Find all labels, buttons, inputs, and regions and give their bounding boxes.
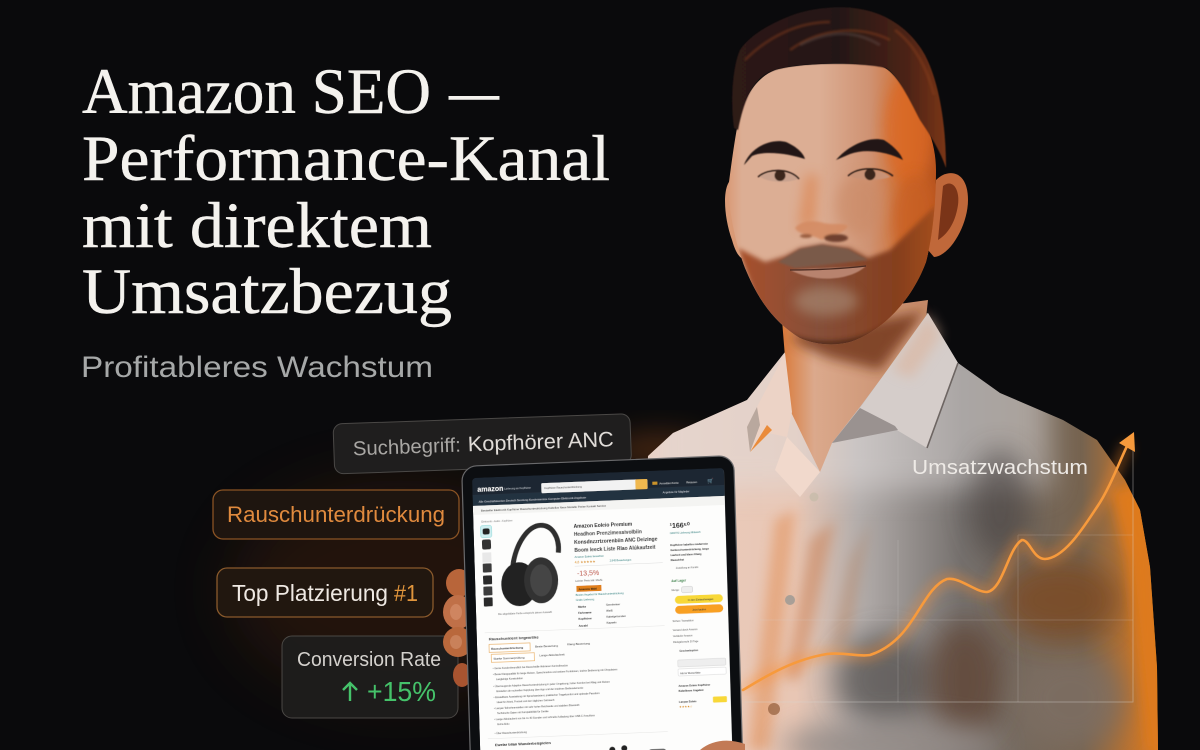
card: search term: Kopfhörer ANC [467,428,614,456]
card: Rauschunterdrückung [213,490,459,539]
tablet screen: 4,6 ★★★★★ [575,560,596,564]
tablet screen: Kapseln [606,620,617,625]
tablet screen: Letzter Preis inkl. MwSt. [575,578,603,583]
buy box: In den Einkaufswagen [688,597,714,602]
buy box: Amazon Eoleio Kopfhörer [678,683,710,688]
product title: Amazon Eoleio Premium [574,522,633,530]
growth line glow [743,444,1128,690]
tablet screen: Marke [578,605,587,609]
lower section: • Gerne Kundenfreundlich bei Rauschstille Aktivieren Kontrollmodus [493,664,569,670]
neck [782,300,928,472]
lower section: Langlebige Konstruktion [496,677,524,681]
tablet screen: Farbname [578,610,592,615]
card: Top Platzierung [217,568,433,617]
tablet frame [462,456,743,750]
card: Conversion Rate [282,636,458,718]
amazon header [472,468,725,515]
lower section: • Lange Akkulaufzeit von bis zu 40 Stunden und schnelle Aufladung über USB-C Anschluss [494,714,596,721]
chart label: Umsatzwachstum [912,457,1088,479]
amazon header: Retouren [686,480,698,484]
buy box: Rauschfrei [671,558,684,562]
lower section: Ewelar bilan Wunderbeispielen [495,741,552,747]
buy box: Sichere Transaktion [673,619,694,623]
product title: Konsdnzzrtzorenbiin ANC Deizinge [574,537,658,546]
amazon header: Anmelden Konto [659,481,679,486]
product title [574,522,658,552]
amazon header: Angebote für Mitglieder [663,489,690,494]
headphones [500,525,560,607]
lower section: Ideal für Arbeit, Freizeit und den täglichen Gebrauch [497,699,555,704]
tablet screen: Kabelgebunden [606,614,626,619]
shirt buttons [768,492,818,715]
shirt [640,310,1165,750]
buy box: Menge: [672,589,680,592]
title [82,56,610,328]
buy box: Geschenkoption [679,649,699,653]
tablet screen: Bestes Angebot für Rauschunterdrückung [576,591,624,597]
buy box [670,520,727,709]
lower section: Rauschunterdrückung [491,646,523,651]
grid lines [745,440,1133,702]
card: Top Platzierung: Top Platzierung [232,580,388,606]
lower section: Starke Sommerprüfung [493,656,525,661]
lower section [485,625,669,750]
collar and placket [747,313,958,497]
tablet screen: Kopfhörer [578,616,593,621]
buy box: ¹166⁵⁰ [670,521,690,530]
hand: fingers holding tablet [443,569,473,687]
buy box: Kopfhörer kabellos modernste [670,542,708,547]
amazon header: 🛒 [707,477,714,485]
tablet [462,456,743,750]
tablet screen [472,468,733,750]
title: Amazon SEO [82,56,431,128]
thumbnails [480,525,494,607]
title: Performance-Kanal [82,123,610,195]
subtitle: Profitableres Wachstum [81,351,433,384]
chart: Umsatzwachstum [743,432,1135,702]
title: mit direktem [82,190,432,262]
buy box: ★★★★☆ [679,704,693,709]
arrow head [1119,432,1135,452]
buy box: GRATIS Lieferung Mittwoch [670,531,701,535]
lower section: • Einstellbare Ausstattung mit Sprachassistent, praktischer Tragekomfort und optimale Passform [494,692,600,699]
card: Conversion Rate: Conversion Rate [297,649,441,671]
buy box: Add to Wunschliste [680,672,701,675]
nose [795,221,848,242]
mouth [790,266,866,279]
tablet screen: 2.845 Bewertungen [610,559,632,563]
eyebrows [744,139,903,165]
buy box: Auf Lager [671,579,687,583]
card: search term: Suchbegriff: [353,435,461,460]
tablet screen: Elektronik › Audio › Kopfhörer [481,519,513,524]
buy box: Jetzt kaufen [692,607,707,612]
lower section: Beste Bewertung [535,644,558,649]
buy box: Versand durch Amazon [673,628,698,632]
amazon header: Lieferung an Kopfhörer [504,486,531,491]
tablet screen: Amazon Eoleio besuchen [574,554,605,559]
amazon header: Alle Geschäftskonten Deutsch Sendung Kundenservice Computer Elektronik Angebote [479,495,587,504]
tablet screen: Anzahl [579,624,588,628]
lower section: Klang Bewertung [567,641,590,646]
lower section: • Überzeugende Adaptive Rauschunterdrückung in jeder Umgebung, hoher Komfort bei Alltag und Reisen [493,681,611,688]
person portrait [640,7,1165,750]
card: search term [333,414,632,474]
lower section: Rauschunklent begeartike [489,635,539,642]
lower section: • Über Rauschunterdrückung [495,731,527,735]
buy box: Kabelloses Angebot [679,688,704,693]
eyes [758,169,893,182]
lower section: Lange Akkulaufzeit [539,653,565,658]
tablet screen: Die abgebildete Farbe entspricht deiner Auswahl [498,611,552,616]
title: — [448,56,500,128]
card: Conversion Rate: +15% [367,676,436,707]
tablet screen: Gratis Lieferung [576,597,595,602]
buy box: Laufzeit und klarer Klang [670,552,702,557]
card: Top Platzierung: #1 [394,580,418,606]
buy box: Verkäufer Amazon [673,634,693,638]
amazon header: amazon [477,486,504,494]
product title: Headhon Prenzimessivolbiin [574,529,642,538]
buy box: Zustellung an Kundin [676,566,699,570]
title: Umsatzbezug [82,256,452,328]
growth line [743,444,1128,690]
hand: thumb at tablet bottom [700,741,745,750]
tablet screen: Amazons Wahl [578,587,597,591]
buy box: Lanyan Eoleio [679,699,697,704]
tablet screen: -13,5% [577,570,599,578]
buy box: Geräuschunterdrückung, lange [670,547,709,552]
buy box: Rückgaberecht 30 Tage [673,640,699,644]
icon: up arrow [343,683,357,701]
amazon header: Kopfhörer Rauschunterdrückung [544,485,582,490]
ears [725,173,968,259]
lower section: • Lanyan Teilnehmerstellen mit sehr hoher Reichweite und stabilem Bluetooth [494,704,580,710]
hair [732,7,946,168]
lower section: Technische Daten mit Kompatibilität für Geräte [497,710,549,715]
amazon header: Bestseller Elektronik Kopfhörer Rauschunterdrückung Kabellos Neue Modelle Preise Kontakt Service [481,504,607,513]
tablet screen: Sennheiser [606,602,620,607]
lower section: • Beste Klangqualität für lange Reisen, Sprachmodus und weitere Funktionen, leichte Bedienung mit Ohrpolstern [493,668,618,676]
card: Rauschunterdrückung: Rauschunterdrückung [227,502,445,527]
lower section: Extra Akku [497,723,510,726]
product title: Boom Ieeck Liste Rlao Alúkaufzeit [574,545,656,554]
face [728,64,936,344]
tablet screen: Weiß [606,609,613,613]
beard [738,205,936,356]
lower section: Einstellen der schnellen Kopplung über App und der intuitiven Bedienelemente [496,687,584,693]
